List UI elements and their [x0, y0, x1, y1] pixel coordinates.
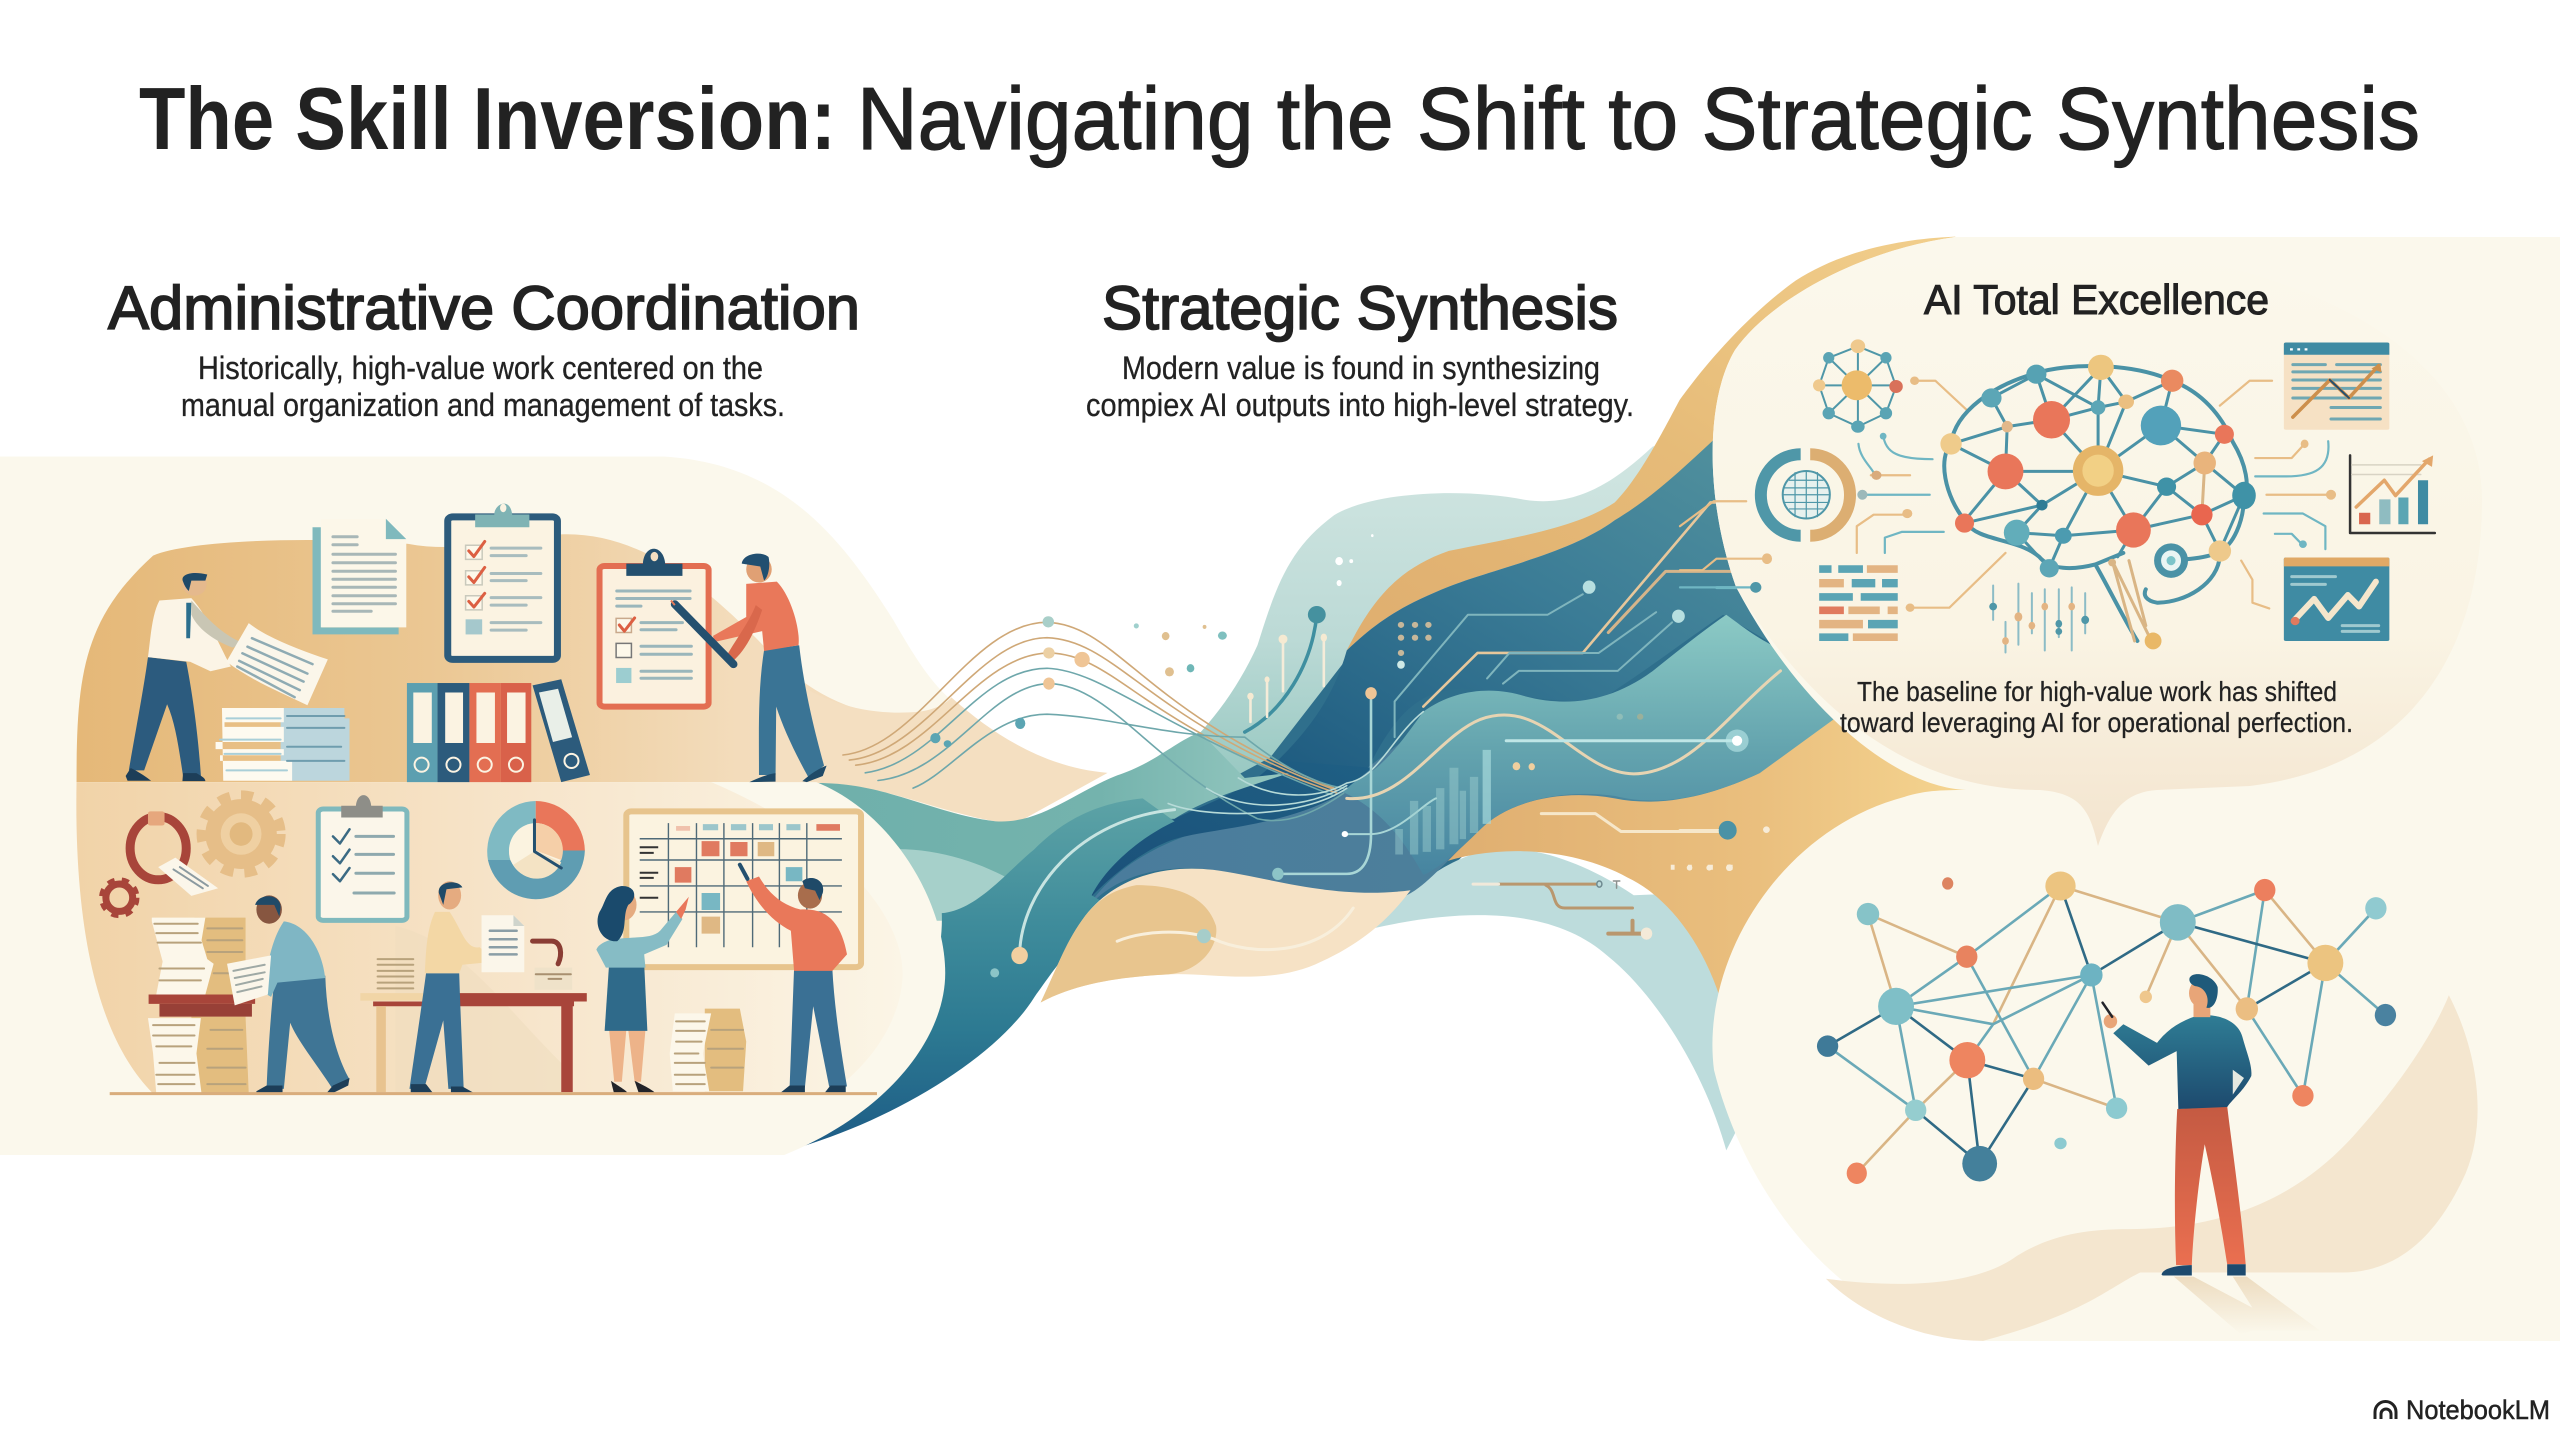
icon: teal checklist [318, 795, 407, 920]
icon: navy clipboard [448, 504, 557, 659]
text: strategic description: Modern value is found in synthesizing [1122, 350, 1600, 386]
connectors [1680, 377, 2336, 612]
figure: man stacking papers [227, 895, 350, 1094]
text: AI total excellence heading: AI Total Excellence [1924, 276, 2269, 323]
icon: right paper pile [670, 1009, 746, 1091]
text: AI description: The baseline for high-value work has shifted [1857, 676, 2337, 707]
figure: man with pencil [671, 554, 827, 782]
icon: dashboard with line chart [2284, 342, 2389, 430]
figure: man pointing at calendar [740, 865, 847, 1094]
text: strategic description [1086, 350, 1634, 423]
network graph [1817, 871, 2396, 1184]
chart: donut with clock hands [487, 801, 585, 899]
bubble: AI total excellence [1713, 237, 2482, 846]
figure: man holding paper at desk [409, 881, 524, 1094]
icon: desk with items [360, 941, 587, 1092]
icon: ring and gears [102, 795, 281, 915]
figure: man sorting papers [126, 572, 242, 781]
stray tan dots on flow [1680, 821, 1770, 871]
ground line [110, 1092, 877, 1095]
title [139, 69, 2420, 168]
flow ribbon: transition from coordination to synthesis [760, 237, 1972, 1153]
panel: right background with two bubbles [1712, 237, 2560, 1341]
text: strategic description: compiex AI outputs into high-level strategy. [1086, 387, 1634, 423]
text: AI description: toward leveraging AI for operational perfection. [1840, 707, 2353, 738]
icon: left paper piles on crate [148, 918, 255, 1094]
panel: administrative background [0, 457, 957, 1155]
text: AI description [1840, 676, 2353, 738]
title: Navigating the Shift to Strategic Synthesis [857, 69, 2420, 168]
icon: document [313, 519, 406, 634]
text: administrative description: manual organization and management of tasks. [181, 387, 785, 423]
illustration: administrative coordination scene [102, 504, 877, 1094]
icon: data bricks [1819, 565, 1898, 641]
panel: lower left bubble [0, 782, 945, 1155]
flow: converging strands [843, 622, 1423, 821]
figure: woman at calendar [596, 886, 689, 1094]
chart: bars with trend arrow [2350, 455, 2435, 533]
brand: NotebookLM: NotebookLM [2406, 1395, 2550, 1425]
chart: calendar board [626, 811, 861, 967]
heading: administrative coordination: Administrative Coordination [108, 274, 860, 342]
chart: sliders [1989, 584, 2089, 652]
icon: notebook arcs [2375, 1402, 2396, 1419]
shadow [2174, 1277, 2320, 1335]
icon: brain network [1940, 355, 2256, 649]
icon: paper stack [216, 708, 350, 781]
illustration: strategist and network [1680, 821, 2478, 1341]
text: administrative description: Historically, high-value work centered on the [198, 350, 763, 386]
flow: circuit lines and nodes [990, 502, 1780, 977]
icon: tilted paper [226, 623, 328, 705]
icon: network cluster [1813, 339, 1903, 433]
text: administrative description [181, 350, 785, 423]
floor shape [1826, 995, 2478, 1341]
icon: segmented globe ring [1761, 454, 1850, 536]
figure: strategist [2103, 974, 2251, 1275]
icon: dashboard with trend [2284, 558, 2389, 641]
icon: orange clipboard [600, 549, 709, 707]
heading: strategic synthesis: Strategic Synthesis [1102, 274, 1618, 342]
illustration: AI brain and dashboards [1680, 339, 2435, 652]
title: The Skill Inversion: [139, 69, 836, 168]
icon: binders [407, 679, 590, 782]
